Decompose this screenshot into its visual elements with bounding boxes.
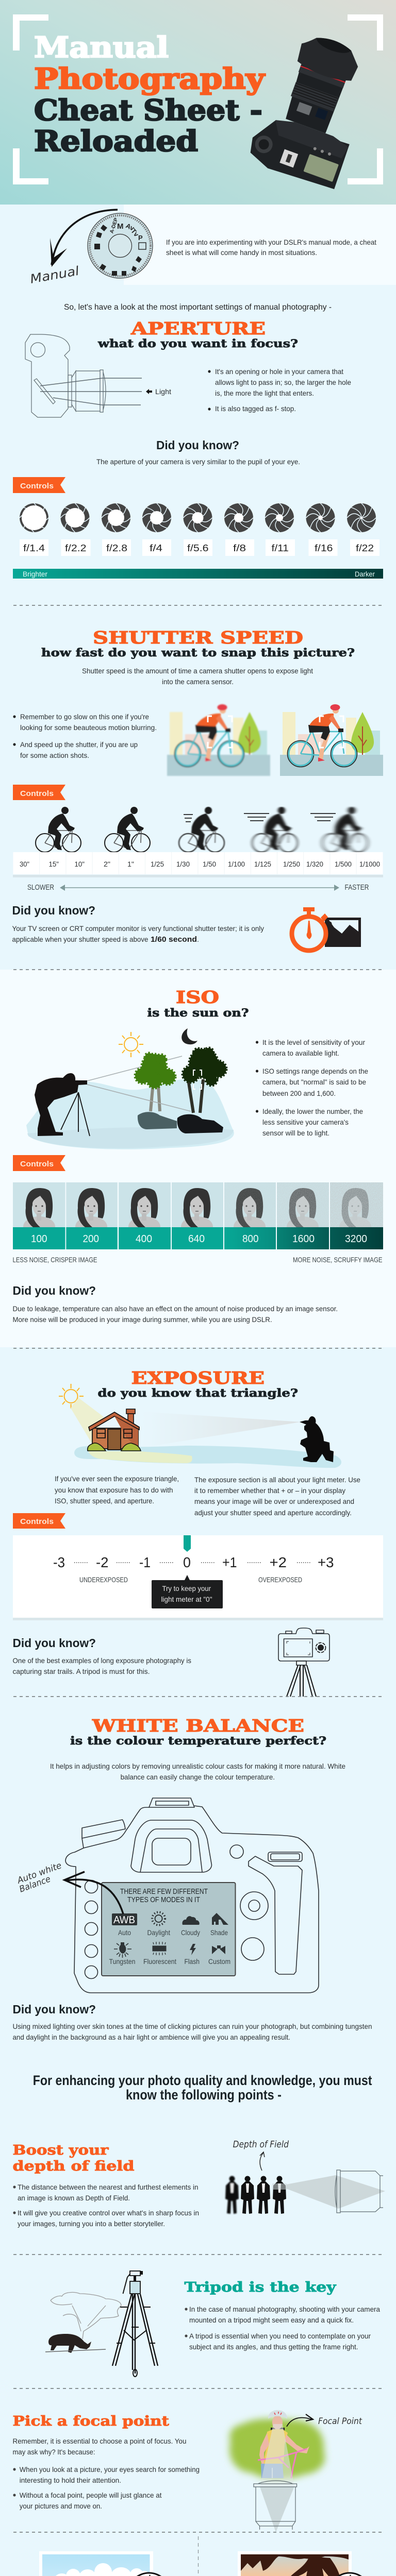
did you know: . <box>197 935 199 943</box>
focal point text: When you look at a picture, your eyes search for something <box>20 2465 200 2473</box>
bullet list: looking for some beauteous motion blurring. <box>20 723 157 732</box>
ribbon: controls: Controls <box>20 482 54 490</box>
did you know <box>96 438 300 466</box>
ribbon: controls: Controls <box>20 789 54 798</box>
bullet list: less sensitive your camera's <box>262 1118 349 1126</box>
illustration: photographer and trees <box>26 1028 234 1149</box>
tripod <box>61 1092 90 1136</box>
icon: mode dial <box>88 213 153 278</box>
icon: stopwatch and photo <box>292 907 361 951</box>
light meter panel: UNDEREXPOSED <box>79 1575 128 1584</box>
did you know <box>12 904 264 944</box>
panel: exposure <box>12 1368 383 1697</box>
heading: shutter speed: SHUTTER SPEED <box>93 628 303 648</box>
intro text: sheet is what will come handy in most situations. <box>166 248 317 257</box>
shutter speed scale: 1/50 <box>203 860 216 868</box>
kneeling photographer <box>300 1416 334 1462</box>
bullet list: It will give you creative control over what's in sharp focus in <box>18 2209 199 2217</box>
f-stop labels: f/5.6 <box>187 543 208 553</box>
heading: white balance: WHITE BALANCE <box>92 1716 304 1736</box>
label: depth of field: Depth of Field <box>233 2139 289 2150</box>
lens <box>254 2481 297 2532</box>
tripod <box>112 2271 158 2377</box>
clock <box>329 2573 370 2576</box>
icon: fluorescent <box>153 1942 166 1955</box>
LCD screen: Fluorescent <box>143 1957 176 1965</box>
icon: tungsten <box>114 1942 131 1958</box>
intro text: If you are into experimenting with your DSLR's manual mode, a cheat <box>166 238 376 246</box>
heading: ISO <box>147 987 249 1019</box>
shutter speed scale: 15" <box>48 860 59 868</box>
focal point text: interesting to hold their attention. <box>20 2476 121 2484</box>
heading: Pick a focal point <box>12 2414 169 2429</box>
icon: mode dial: Tv <box>129 227 141 239</box>
heading: exposure: do you know that triangle? <box>98 1386 298 1399</box>
exposure text left: ISO, shutter speed, and aperture. <box>55 1497 154 1505</box>
light meter panel: -1 <box>139 1554 151 1570</box>
icon: mode dial: A-DEP <box>109 217 120 234</box>
ISO noise chart <box>13 1182 383 1249</box>
icon: flash <box>190 1944 196 1955</box>
did you know: One of the best examples of long exposure photography is <box>12 1656 191 1665</box>
definition text <box>82 667 313 686</box>
ISO noise chart: 200 <box>82 1233 99 1245</box>
did you know: Did you know? <box>12 904 95 917</box>
moon <box>182 1028 197 1044</box>
light meter panel: OVEREXPOSED <box>258 1575 302 1584</box>
LCD screen: Custom <box>208 1957 230 1965</box>
bullet list: between 200 and 1,600. <box>262 1089 336 1097</box>
shutter speed scale: 10" <box>74 860 85 868</box>
exposure text right: it to remember whether that + or – in your display <box>194 1486 345 1495</box>
illustration: tripod with rhino and tree <box>45 2271 158 2377</box>
ISO noise chart: 800 <box>242 1233 259 1245</box>
bullet list: It is also tagged as f- stop. <box>215 404 296 413</box>
f-stop labels <box>20 539 380 556</box>
LCD screen <box>102 1883 235 1976</box>
arrow to dial <box>50 210 118 267</box>
bullet list: A tripod is essential when you need to contemplate on your <box>189 2332 371 2340</box>
ribbon: controls: Controls <box>20 1517 54 1526</box>
shutter speed scale: 1" <box>127 860 134 868</box>
label: focal point: Focal Point <box>318 2416 362 2427</box>
diagram: camera cross-section with light path <box>25 334 171 417</box>
arrow: focal point <box>287 2414 313 2427</box>
icon: daylight <box>152 1912 165 1925</box>
shutter speed scale: 1/250 <box>283 860 300 868</box>
LCD screen: Cloudy <box>181 1928 200 1937</box>
ribbon: controls <box>13 1155 65 1171</box>
title: Manual <box>34 30 169 64</box>
bullet list: allows light to pass in; so, the larger the hole <box>215 378 351 386</box>
LCD screen: THERE ARE FEW DIFFERENT <box>120 1887 208 1896</box>
LCD screen: Flash <box>185 1957 200 1965</box>
callout: light meter at "0" <box>161 1595 212 1603</box>
heading: following points: know the following points - <box>126 2087 282 2103</box>
shutter speed scale: 1/125 <box>254 860 271 868</box>
bullet list: It is the level of sensitivity of your <box>262 1038 365 1046</box>
LCD screen: Shade <box>210 1928 228 1937</box>
bullet list <box>13 2183 199 2228</box>
icon: mode dial: P <box>138 234 143 242</box>
cyclist silhouettes row <box>36 807 368 852</box>
shutter speed scale: 1/320 <box>306 860 323 868</box>
did you know <box>12 2003 372 2041</box>
callout: Try to keep your <box>162 1584 211 1592</box>
callout <box>152 1575 223 1608</box>
did you know: The aperture of your camera is very similar to the pupil of your eye. <box>96 457 300 466</box>
did you know <box>12 1636 191 1675</box>
heading: exposure: EXPOSURE <box>131 1368 265 1388</box>
label: Manual: Manual <box>29 264 80 286</box>
panel: sunrise and sunset <box>238 2551 370 2576</box>
panel: depth of field <box>12 2139 385 2228</box>
illustration: focal point <box>229 2410 325 2532</box>
icon: DSLR camera with lens <box>244 26 382 192</box>
bullet list: In the case of manual photography, shooting with your camera <box>189 2305 380 2313</box>
shutter speed scale: 1/100 <box>228 860 245 868</box>
f-stop labels: f/8 <box>233 543 246 553</box>
arrow: auto white balance <box>64 1872 123 1914</box>
heading: following points <box>33 2073 372 2103</box>
did you know: Did you know? <box>12 1636 96 1650</box>
focal point text: Remember, it is essential to choose a point of focus. You <box>12 2437 187 2445</box>
panel: white balance <box>12 1716 372 2041</box>
bullet list: camera to available light. <box>262 1049 339 1057</box>
bullet list: Remember to go slow on this one if you're <box>20 713 149 721</box>
title: Cheat Sheet - <box>34 93 262 127</box>
ribbon: controls <box>13 785 65 800</box>
focal point text <box>12 2437 200 2510</box>
slower faster arrow: FASTER <box>344 883 369 892</box>
heading: Boost your <box>12 2143 109 2158</box>
heading: exposure <box>98 1368 298 1399</box>
intro text <box>166 238 376 257</box>
light meter panel: 0 <box>183 1554 191 1570</box>
panel: aperture <box>13 318 383 579</box>
heading: aperture <box>97 318 298 350</box>
did you know: applicable when your shutter speed is above <box>12 935 148 943</box>
shutter speed scale: 1/1000 <box>359 860 380 868</box>
illustration: blurred cyclist <box>167 704 270 776</box>
f-stop labels: f/1.4 <box>23 543 45 553</box>
illustration: lens and subjects <box>225 2170 385 2214</box>
slower faster arrow: SLOWER <box>27 883 54 892</box>
icon: shade <box>212 1913 228 1925</box>
bullet list: The distance between the nearest and furthest elements in <box>18 2183 198 2191</box>
ground <box>74 1446 341 1468</box>
did you know: 1/60 second <box>151 935 197 944</box>
ribbon: controls: Controls <box>20 1160 54 1168</box>
panel: tripod <box>45 2271 380 2377</box>
green blur <box>229 2419 325 2479</box>
light meter panel: +1 <box>222 1554 237 1570</box>
section tint <box>0 970 396 1347</box>
bullet list: And speed up the shutter, if you are up <box>20 740 138 749</box>
sun <box>59 1384 84 1409</box>
bullet list: mounted on a tripod might seem easy and a quick fix. <box>189 2316 354 2324</box>
panel: intro <box>29 205 396 286</box>
LCD screen: Auto <box>118 1928 131 1937</box>
light meter panel: +2 <box>269 1554 287 1570</box>
bullet list: ISO settings range depends on the <box>262 1067 368 1075</box>
heading: shutter speed: how fast do you want to snap this picture? <box>41 646 355 659</box>
bullet list <box>256 1038 368 1137</box>
icon: cloudy <box>182 1916 200 1925</box>
bullet list <box>13 713 157 759</box>
panel: ISO <box>12 987 383 1324</box>
did you know <box>12 1284 338 1324</box>
heading: aperture: APERTURE <box>130 318 266 338</box>
girl <box>258 2410 309 2487</box>
exposure text right: adjust your shutter speed and aperture accordingly. <box>194 1509 352 1517</box>
did you know: Did you know? <box>156 438 239 452</box>
title: Reloaded <box>34 124 198 158</box>
f-stop labels: f/4 <box>150 543 162 553</box>
bullet list: sensor will be to light. <box>262 1129 329 1137</box>
ribbon: controls <box>13 1513 65 1529</box>
noise scale captions <box>12 1256 383 1264</box>
heading: ISO: ISO <box>176 987 219 1007</box>
photographer silhouette <box>35 1073 87 1136</box>
icon: custom <box>212 1945 225 1954</box>
definition text: Shutter speed is the amount of time a camera shutter opens to expose light <box>82 667 313 675</box>
light meter panel: -2 <box>96 1554 108 1570</box>
f-stop labels: f/16 <box>315 543 333 553</box>
ISO noise chart: 100 <box>31 1233 47 1245</box>
tree <box>51 2292 121 2339</box>
LCD screen: TYPES OF MODES IN IT <box>127 1895 200 1904</box>
sun <box>119 1032 143 1057</box>
bullet list <box>208 367 351 413</box>
shutter speed scale <box>13 852 383 877</box>
definition text <box>50 1762 345 1781</box>
f-stop labels: f/22 <box>356 543 374 553</box>
arrow: depth of field <box>260 2152 265 2171</box>
shutter speed scale: 30" <box>20 860 29 868</box>
rhino <box>48 2334 91 2353</box>
heading: shutter speed <box>41 628 355 659</box>
shutter speed scale: 1/25 <box>151 860 164 868</box>
heading: aperture: what do you want in focus? <box>97 337 298 350</box>
photo: sunset <box>238 2551 370 2576</box>
focal point text: may ask why? It's because: <box>12 2448 95 2456</box>
noise scale captions: LESS NOISE, CRISPER IMAGE <box>12 1256 97 1264</box>
heading: ISO: is the sun on? <box>147 1006 249 1019</box>
ribbon: controls <box>13 477 65 493</box>
panel: hero <box>0 0 396 205</box>
exposure text left <box>55 1475 179 1505</box>
bullet list: camera, but "normal" is said to be <box>262 1078 366 1086</box>
exposure text right: means your image will be over or underexposed and <box>194 1497 354 1505</box>
clock <box>128 2573 170 2576</box>
heading: white balance <box>70 1716 326 1747</box>
f-stop labels: f/2.2 <box>65 543 87 553</box>
bullet list: is, the more the light that enters. <box>215 389 314 397</box>
illustration: sharp cyclist <box>280 704 383 776</box>
light meter panel: +3 <box>318 1554 334 1570</box>
icon: mode dial: Av <box>125 222 136 232</box>
icon: mode dial: M <box>117 222 124 231</box>
tree foliage <box>135 1053 175 1088</box>
shutter speed scale: 2" <box>104 860 110 868</box>
ISO noise chart: 3200 <box>345 1233 367 1245</box>
illustration: exposure scene <box>59 1384 341 1468</box>
bullet list <box>185 2305 380 2351</box>
did you know: More noise will be produced in your image during summer, while you are using DSLR. <box>12 1315 272 1324</box>
f-stop labels: f/2.8 <box>106 543 127 553</box>
did you know: Your TV screen or CRT computer monitor is very functional shutter tester; it is only <box>12 924 264 933</box>
exposure text left: If you've ever seen the exposure triangle, <box>55 1475 179 1483</box>
shutter speed scale: 1/30 <box>176 860 190 868</box>
bullet list: It's an opening or hole in your camera that <box>215 367 343 376</box>
heading: Tripod is the key <box>185 2280 337 2295</box>
title: Photography <box>34 62 266 95</box>
aperture stops row <box>20 503 376 532</box>
brightness gradient bar: Darker <box>355 570 375 578</box>
slower faster arrow <box>27 883 369 892</box>
f-stop labels: f/11 <box>271 543 289 553</box>
bullet list: subject and its angles, and thus getting the frame right. <box>189 2343 358 2351</box>
bullet list: an image is known as Depth of Field. <box>18 2194 130 2202</box>
label: auto white balance: Auto white <box>15 1860 63 1886</box>
photo: landscape <box>39 2551 170 2576</box>
ISO noise chart: 400 <box>136 1233 152 1245</box>
definition text: into the camera sensor. <box>162 677 234 686</box>
house <box>88 1409 141 1451</box>
title <box>34 30 266 158</box>
heading: white balance: is the colour temperature perfect? <box>70 1734 326 1747</box>
did you know: Due to leakage, temperature can also have an effect on the amount of noise produced by an image sensor. <box>12 1304 338 1313</box>
heading <box>12 2143 134 2174</box>
shutter speed scale: 1/500 <box>335 860 352 868</box>
panel: golden hour <box>38 2551 170 2576</box>
focal point text: your pictures and move on. <box>20 2502 102 2510</box>
ISO noise chart: 1600 <box>292 1233 315 1245</box>
heading: depth of field <box>12 2159 134 2174</box>
did you know: Did you know? <box>12 2003 96 2016</box>
did you know: Did you know? <box>12 1284 96 1297</box>
diagram: camera cross-section with light path: Light <box>155 387 171 396</box>
panel: shutter speed <box>12 628 383 951</box>
illustration: DSLR back outline <box>15 1798 319 1993</box>
icon: AWB: AWB <box>113 1914 135 1926</box>
ISO noise chart: 640 <box>188 1233 205 1245</box>
bullet list: your images, turning you into a better storyteller. <box>18 2219 165 2228</box>
definition text: balance can easily change the colour temperature. <box>121 1773 275 1781</box>
exposure text left: you know that exposure has to do with <box>55 1486 173 1494</box>
label: auto white balance: Balance <box>18 1874 52 1895</box>
focal point text: Without a focal point, people will just glance at <box>20 2491 162 2499</box>
light meter panel: -3 <box>53 1554 65 1570</box>
brightness gradient bar <box>13 569 383 579</box>
panel: focal point <box>12 2410 362 2532</box>
definition text: It helps in adjusting colors by removing unrealistic colour casts for making it more natural. White <box>50 1762 345 1770</box>
light meter panel <box>13 1535 383 1620</box>
bullet list: Ideally, the lower the number, the <box>262 1107 363 1115</box>
viewfinder corner brackets <box>13 14 383 184</box>
exposure text right: The exposure section is all about your light meter. Use <box>194 1476 360 1484</box>
did you know: capturing star trails. A tripod is must for this. <box>12 1667 150 1675</box>
LCD screen: Daylight <box>147 1928 170 1937</box>
exposure text right <box>194 1476 360 1517</box>
brightness gradient bar: Brighter <box>23 570 47 578</box>
icon: camera on tripod <box>278 1628 329 1697</box>
bullet list: for some action shots. <box>20 751 89 759</box>
did you know: Using mixed lighting over skin tones at the time of clicking pictures can ruin your photograph, but combining tungsten <box>12 2022 372 2030</box>
LCD screen: Tungsten <box>109 1957 135 1965</box>
lead-in text: So, let's have a look at the most important settings of manual photography - <box>64 303 332 312</box>
did you know: and daylight in the background as a hair light or ambience will give you an appealing result. <box>12 2033 290 2041</box>
